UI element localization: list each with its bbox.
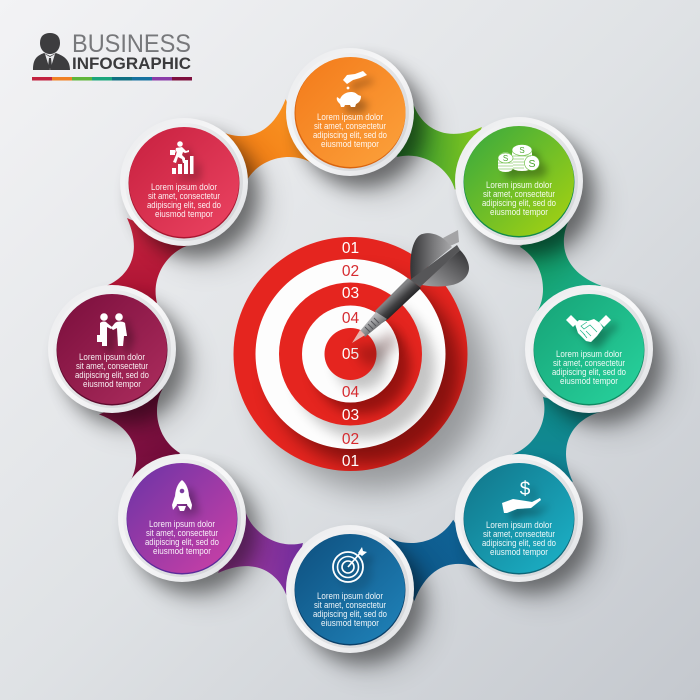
bullseye xyxy=(324,328,376,380)
text: adipiscing elit, sed do xyxy=(75,370,149,380)
panel: purple xyxy=(118,454,264,600)
panel: orange xyxy=(286,48,432,194)
text xyxy=(313,591,387,628)
panel: blue xyxy=(286,525,432,671)
text xyxy=(552,349,626,386)
text: adipiscing elit, sed do xyxy=(313,130,387,140)
text: eiusmod tempor xyxy=(490,547,548,557)
text: sit amet, consectetur xyxy=(148,191,220,201)
ring numbers: 03 xyxy=(342,407,359,424)
icon: runner on bar chart xyxy=(170,141,194,174)
logo: business infographic xyxy=(32,30,192,80)
icon: target with arrow xyxy=(333,547,367,582)
grip xyxy=(360,312,387,337)
icon: businessmen shaking hands xyxy=(97,313,127,346)
barrel xyxy=(375,278,421,323)
panel: green xyxy=(455,117,601,263)
ring numbers: 01 xyxy=(342,240,359,257)
text: Lorem ipsum dolor xyxy=(486,520,552,530)
panel: teal xyxy=(455,454,601,600)
top flight xyxy=(443,230,459,246)
text: Lorem ipsum dolor xyxy=(486,180,552,190)
ring 3 xyxy=(279,282,422,426)
text: sit amet, consectetur xyxy=(553,358,625,368)
connector ring xyxy=(80,80,620,620)
ring numbers: 04 xyxy=(342,384,359,401)
icon: rocket xyxy=(172,480,192,511)
ring numbers: 04 xyxy=(342,310,359,327)
shaft xyxy=(410,245,460,287)
ring numbers: 03 xyxy=(342,285,359,302)
ring numbers xyxy=(342,240,359,470)
text: sit amet, consectetur xyxy=(483,529,555,539)
needle xyxy=(352,330,365,343)
text: sit amet, consectetur xyxy=(146,528,218,538)
text: eiusmod tempor xyxy=(321,618,379,628)
panel: maroon xyxy=(48,285,194,431)
ring numbers: 01 xyxy=(342,453,359,470)
title: INFOGRAPHIC: INFOGRAPHIC xyxy=(72,55,191,73)
panel: red xyxy=(120,118,266,264)
text: Lorem ipsum dolor xyxy=(317,112,383,122)
icon: hand with dollar xyxy=(502,479,541,513)
text: sit amet, consectetur xyxy=(76,361,148,371)
ring numbers: 02 xyxy=(342,263,359,280)
target xyxy=(234,237,486,490)
ring numbers: 02 xyxy=(342,431,359,448)
text xyxy=(482,520,556,557)
icon: businessman xyxy=(33,33,70,70)
text: adipiscing elit, sed do xyxy=(552,367,626,377)
panel: jade xyxy=(525,285,671,431)
text xyxy=(313,112,387,149)
text xyxy=(145,519,219,556)
icon: piggy bank xyxy=(337,71,367,107)
icon: coins: S xyxy=(528,158,536,170)
text: Lorem ipsum dolor xyxy=(149,519,215,529)
left flight xyxy=(410,233,452,279)
text: eiusmod tempor xyxy=(155,209,213,219)
icon: coins: S xyxy=(519,146,525,155)
ring numbers: 05 xyxy=(342,346,359,363)
right flight xyxy=(422,250,469,286)
text: sit amet, consectetur xyxy=(314,121,386,131)
text: sit amet, consectetur xyxy=(314,600,386,610)
grip knurling xyxy=(365,318,379,332)
text: adipiscing elit, sed do xyxy=(145,537,219,547)
dart xyxy=(352,230,469,368)
text: eiusmod tempor xyxy=(83,379,141,389)
text: adipiscing elit, sed do xyxy=(147,200,221,210)
text: adipiscing elit, sed do xyxy=(482,538,556,548)
text: eiusmod tempor xyxy=(490,207,548,217)
icon: coins xyxy=(498,144,540,172)
ring 4 xyxy=(302,306,399,402)
text: eiusmod tempor xyxy=(321,139,379,149)
text: Lorem ipsum dolor xyxy=(151,182,217,192)
text xyxy=(147,182,221,219)
icon: handshake xyxy=(566,315,611,342)
text: sit amet, consectetur xyxy=(483,189,555,199)
text: eiusmod tempor xyxy=(560,376,618,386)
text xyxy=(482,180,556,217)
text: Lorem ipsum dolor xyxy=(317,591,383,601)
text: adipiscing elit, sed do xyxy=(482,198,556,208)
text: Lorem ipsum dolor xyxy=(556,349,622,359)
rainbow bar xyxy=(32,77,192,80)
ring 2 xyxy=(256,259,446,449)
ring 1 xyxy=(234,237,468,471)
text xyxy=(75,352,149,389)
text: adipiscing elit, sed do xyxy=(313,609,387,619)
icon: hand with dollar: $ xyxy=(520,479,531,500)
text: eiusmod tempor xyxy=(153,546,211,556)
text: Lorem ipsum dolor xyxy=(79,352,145,362)
icon: coins: S xyxy=(503,154,508,163)
title: BUSINESS: BUSINESS xyxy=(72,30,191,58)
